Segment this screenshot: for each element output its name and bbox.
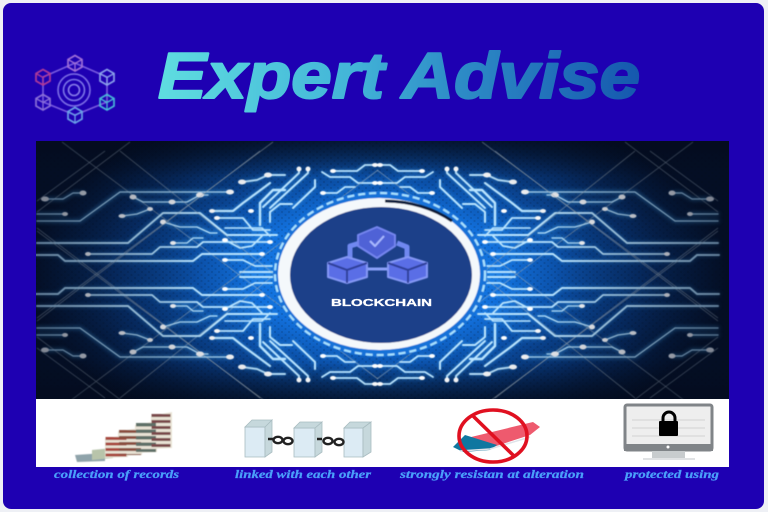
icon: monitor with padlock (624, 405, 713, 460)
circuit glow (36, 165, 719, 384)
icon: linked blocks with chains (245, 420, 371, 457)
caption 1: collection of records (54, 467, 179, 481)
central ring (273, 191, 487, 357)
caption 3: strongly resistan at alteration (399, 467, 584, 481)
icon: eraser with prohibition sign (453, 410, 540, 462)
captions (54, 467, 719, 481)
title: Expert Advise (158, 39, 640, 112)
icon: stacks of books (75, 412, 172, 462)
blockchain label: BLOCKCHAIN (331, 298, 432, 309)
white icon strip (36, 399, 729, 467)
hero image: blockchain circuit (36, 141, 729, 407)
blockchain icon (328, 227, 427, 283)
logo icon: hexagonal network of cubes (36, 56, 114, 123)
caption 4: protected using (624, 467, 719, 481)
circuit traces (36, 142, 719, 407)
caption 2: linked with each other (235, 467, 371, 481)
